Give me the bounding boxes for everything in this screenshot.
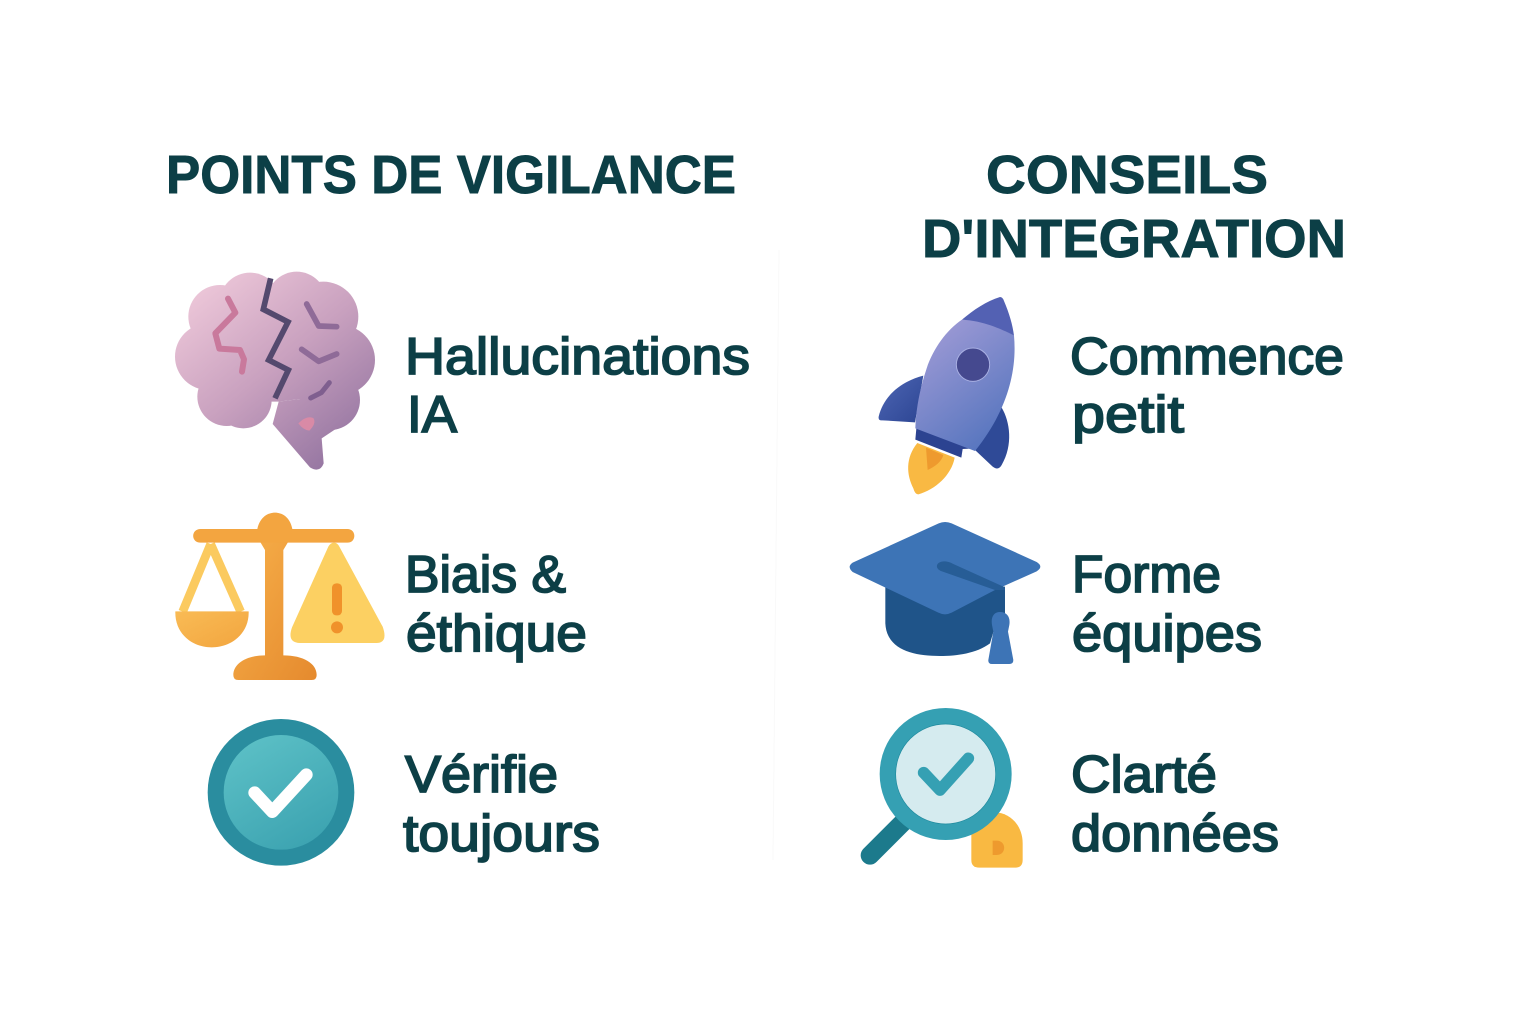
- text: commence petit: Commence: [1070, 328, 1344, 386]
- heading: conseils d'integration: CONSEILS: [986, 145, 1268, 205]
- icon: check badge: [208, 719, 354, 866]
- icon: cracked brain: [175, 272, 375, 470]
- text: verifie toujours: Vérifie: [405, 746, 558, 804]
- text: forme equipes: Forme: [1072, 546, 1221, 604]
- text: hallucinations IA: Hallucinations: [405, 328, 750, 386]
- text: clarte donnees: Clarté: [1071, 746, 1217, 804]
- text: forme equipes: [1072, 546, 1262, 663]
- text: hallucinations IA: [405, 328, 750, 444]
- text: biais et ethique: [405, 546, 587, 663]
- text: verifie toujours: toujours: [403, 805, 600, 863]
- heading: points de vigilance: POINTS DE VIGILANCE: [166, 145, 736, 205]
- heading: conseils d'integration: D'INTEGRATION: [922, 209, 1346, 269]
- text: biais et ethique: Biais &: [405, 546, 566, 604]
- heading: conseils d'integration: [922, 145, 1346, 269]
- text: biais et ethique: éthique: [406, 605, 587, 663]
- text: clarte donnees: [1071, 746, 1279, 863]
- text: commence petit: [1070, 328, 1344, 444]
- icon: graduation cap: [850, 522, 1040, 664]
- text: clarte donnees: données: [1071, 805, 1279, 863]
- icon: rocket: [879, 297, 1015, 494]
- text: commence petit: petit: [1072, 386, 1185, 444]
- text: forme equipes: équipes: [1072, 605, 1262, 663]
- column divider: [773, 250, 779, 860]
- icon: scales with warning triangle: [175, 513, 385, 680]
- text: verifie toujours: [403, 746, 600, 863]
- icon: magnifier with data lock: [870, 708, 1023, 868]
- text: hallucinations IA: IA: [407, 386, 457, 444]
